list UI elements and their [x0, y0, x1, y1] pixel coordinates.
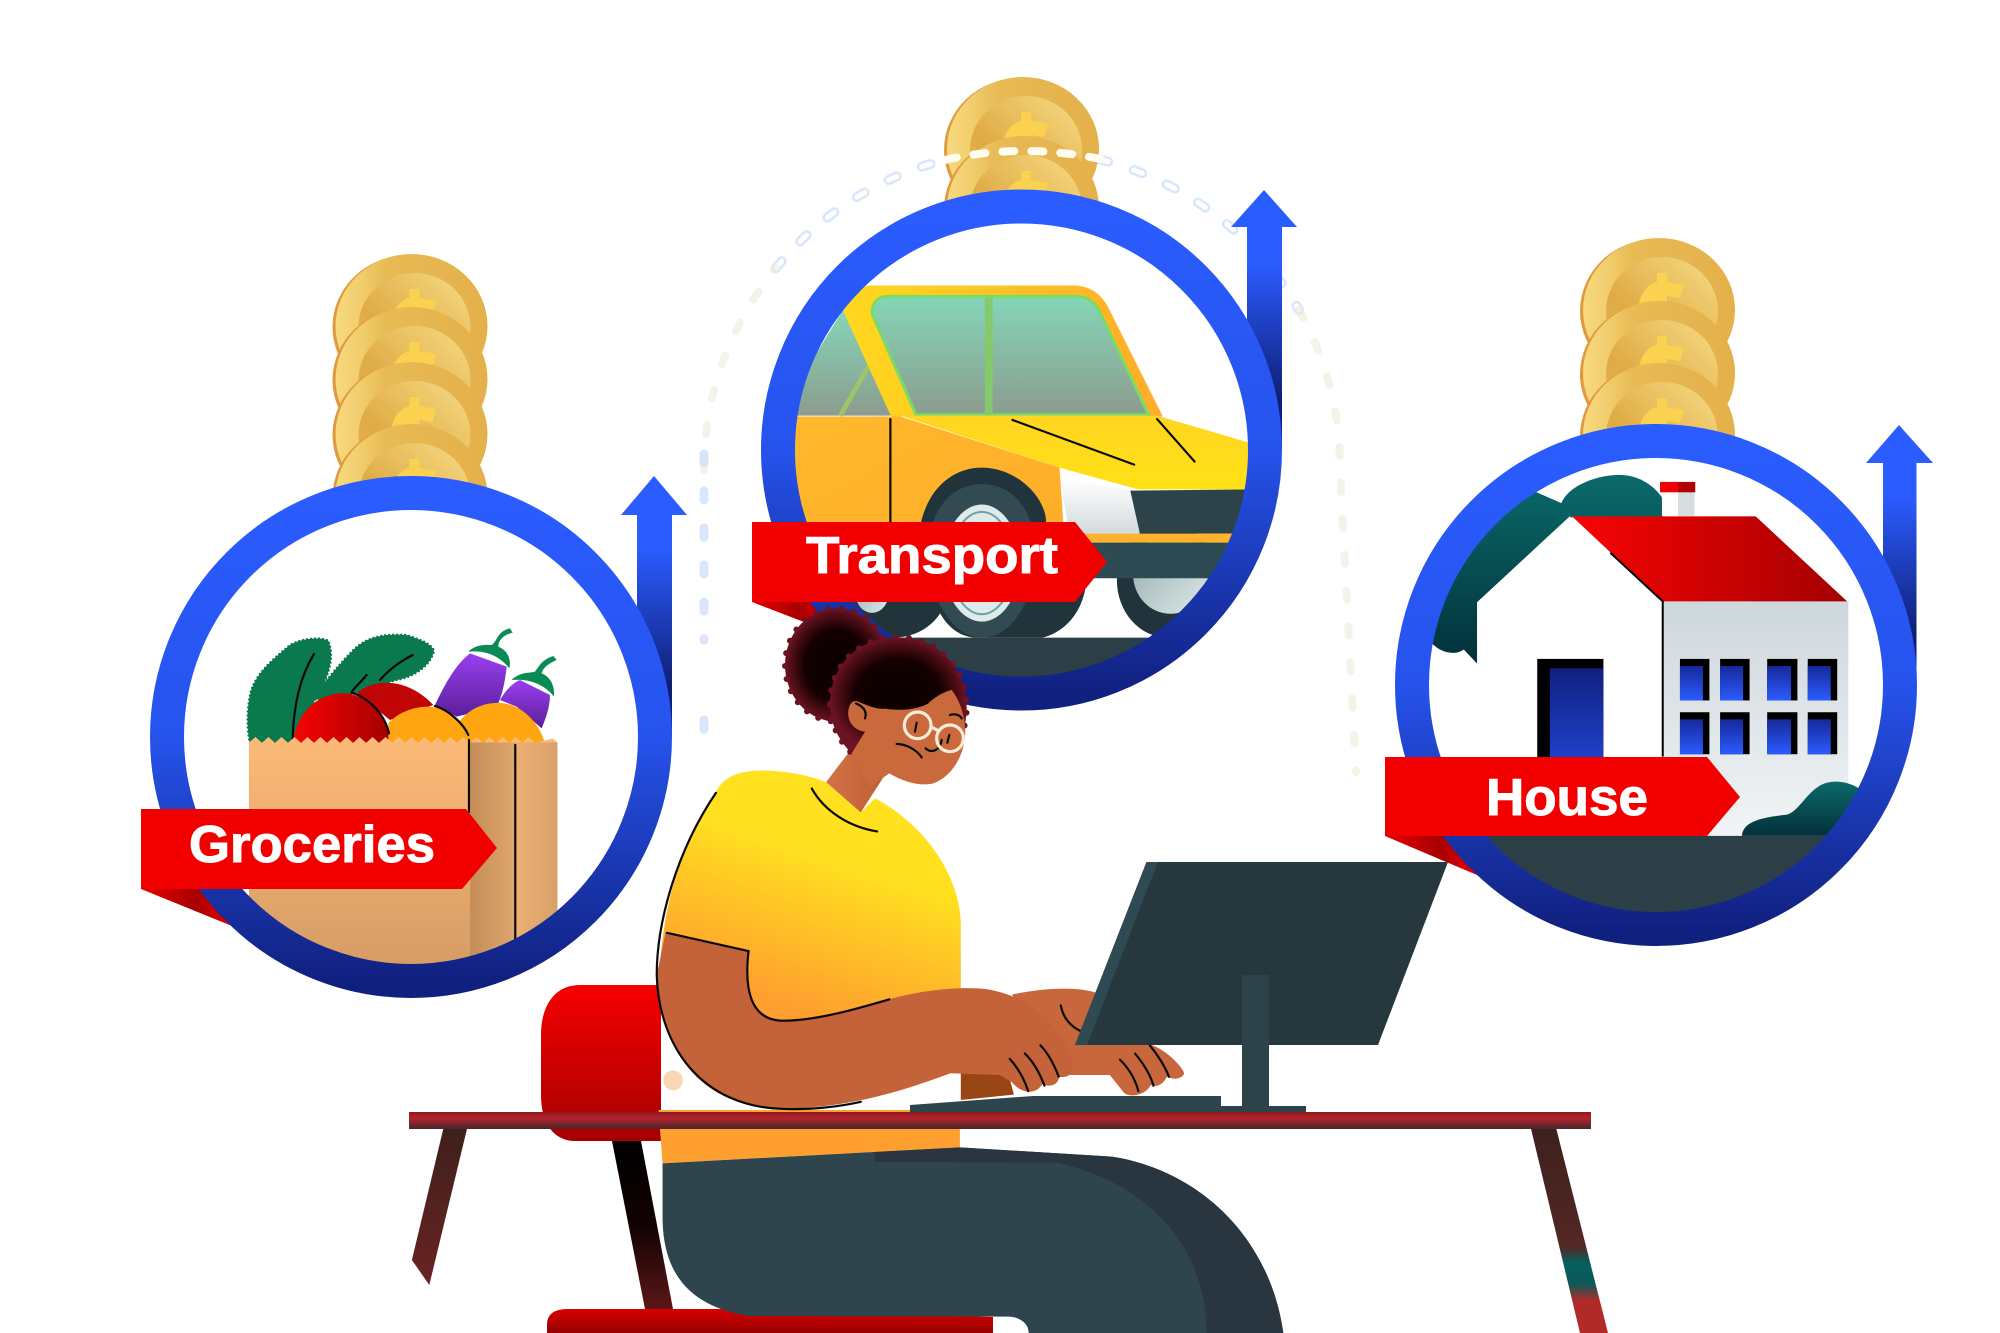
circle interior — [165, 491, 657, 983]
hair — [830, 637, 967, 753]
panel: transport — [752, 77, 1297, 724]
smudge — [663, 1070, 683, 1090]
monitor — [1075, 862, 1448, 1045]
front wall — [1477, 516, 1571, 664]
chair stem — [612, 1141, 673, 1309]
panel: house — [1385, 238, 1933, 940]
grille — [1130, 489, 1253, 534]
arrow: house — [1866, 425, 1933, 685]
panel: groceries — [141, 254, 687, 986]
ring: house — [1412, 441, 1900, 929]
banner tail: transport — [752, 602, 830, 632]
door and fender — [795, 416, 1064, 522]
banner: house: House — [1486, 769, 1648, 827]
upper body — [657, 750, 1184, 1109]
arrow: groceries — [621, 476, 687, 737]
facial lines — [856, 703, 962, 757]
front arm — [657, 932, 1073, 1109]
door — [1537, 659, 1603, 758]
ground — [1486, 836, 1826, 912]
oranges — [388, 706, 460, 743]
banner: transport — [752, 522, 1107, 602]
ring: transport — [778, 206, 1265, 694]
banner tail: house — [1385, 836, 1477, 875]
coin stack: house — [1580, 238, 1735, 508]
person — [657, 608, 1283, 1333]
monitor stand — [1191, 975, 1306, 1114]
shirt — [659, 770, 961, 1039]
lower body — [659, 1110, 1283, 1333]
roof — [843, 286, 1163, 416]
side wall — [1663, 601, 1848, 837]
grocery bag with produce — [248, 628, 557, 986]
hood — [901, 416, 1253, 489]
trouser shadow — [874, 1147, 1283, 1333]
desk left leg — [412, 1128, 467, 1285]
wheels — [854, 532, 1208, 638]
produce — [248, 628, 557, 744]
banner: transport: Transport — [806, 527, 1058, 585]
banner: groceries: Groceries — [189, 816, 435, 874]
eggplants — [435, 628, 557, 728]
computer — [910, 862, 1448, 1114]
trees — [1431, 475, 1663, 664]
monitor stand on screen — [1242, 975, 1269, 1045]
bush — [1742, 782, 1864, 836]
bumper — [1084, 534, 1232, 543]
chair — [541, 985, 993, 1333]
front wheel — [918, 468, 1086, 638]
shirt hem — [659, 1110, 960, 1163]
chair seat — [547, 1309, 993, 1333]
ring: groceries — [167, 493, 655, 981]
coin stack: groceries — [332, 254, 488, 488]
house — [1432, 474, 1858, 912]
banner: groceries — [141, 809, 497, 889]
face — [848, 690, 965, 787]
keyboard — [910, 1096, 1221, 1114]
bun — [785, 608, 888, 722]
rear glass — [798, 310, 891, 416]
glasses — [904, 712, 963, 752]
banner tail: groceries — [141, 889, 232, 926]
roof — [1572, 516, 1847, 601]
body outline — [657, 789, 889, 1109]
coin stack: transport — [944, 77, 1099, 281]
banner: house — [1385, 757, 1740, 836]
chair back — [541, 985, 661, 1141]
arrow: transport — [1231, 190, 1297, 450]
head — [785, 608, 967, 787]
circle interior — [776, 204, 1268, 696]
neck — [826, 750, 889, 812]
leaves — [248, 635, 434, 743]
bag body — [249, 737, 557, 986]
dotted money trail — [704, 150, 1356, 772]
desk — [409, 1112, 1608, 1333]
circle interior — [1410, 439, 1902, 931]
desk top — [409, 1112, 1591, 1129]
windows — [1680, 659, 1837, 754]
ground — [902, 638, 1148, 676]
desk right leg — [1531, 1128, 1608, 1333]
windshield — [872, 296, 1149, 415]
finger lines — [1010, 1005, 1169, 1091]
bag — [249, 737, 557, 986]
back forearm and hand — [1012, 989, 1184, 1095]
trousers — [663, 1147, 1283, 1333]
car — [795, 286, 1248, 676]
under arm shadow — [961, 1064, 1014, 1100]
dashes across coins — [945, 151, 1105, 160]
monitor edge — [1075, 862, 1158, 1045]
tomatoes — [357, 683, 433, 720]
chimney — [1660, 482, 1695, 516]
headlight — [1062, 489, 1140, 534]
